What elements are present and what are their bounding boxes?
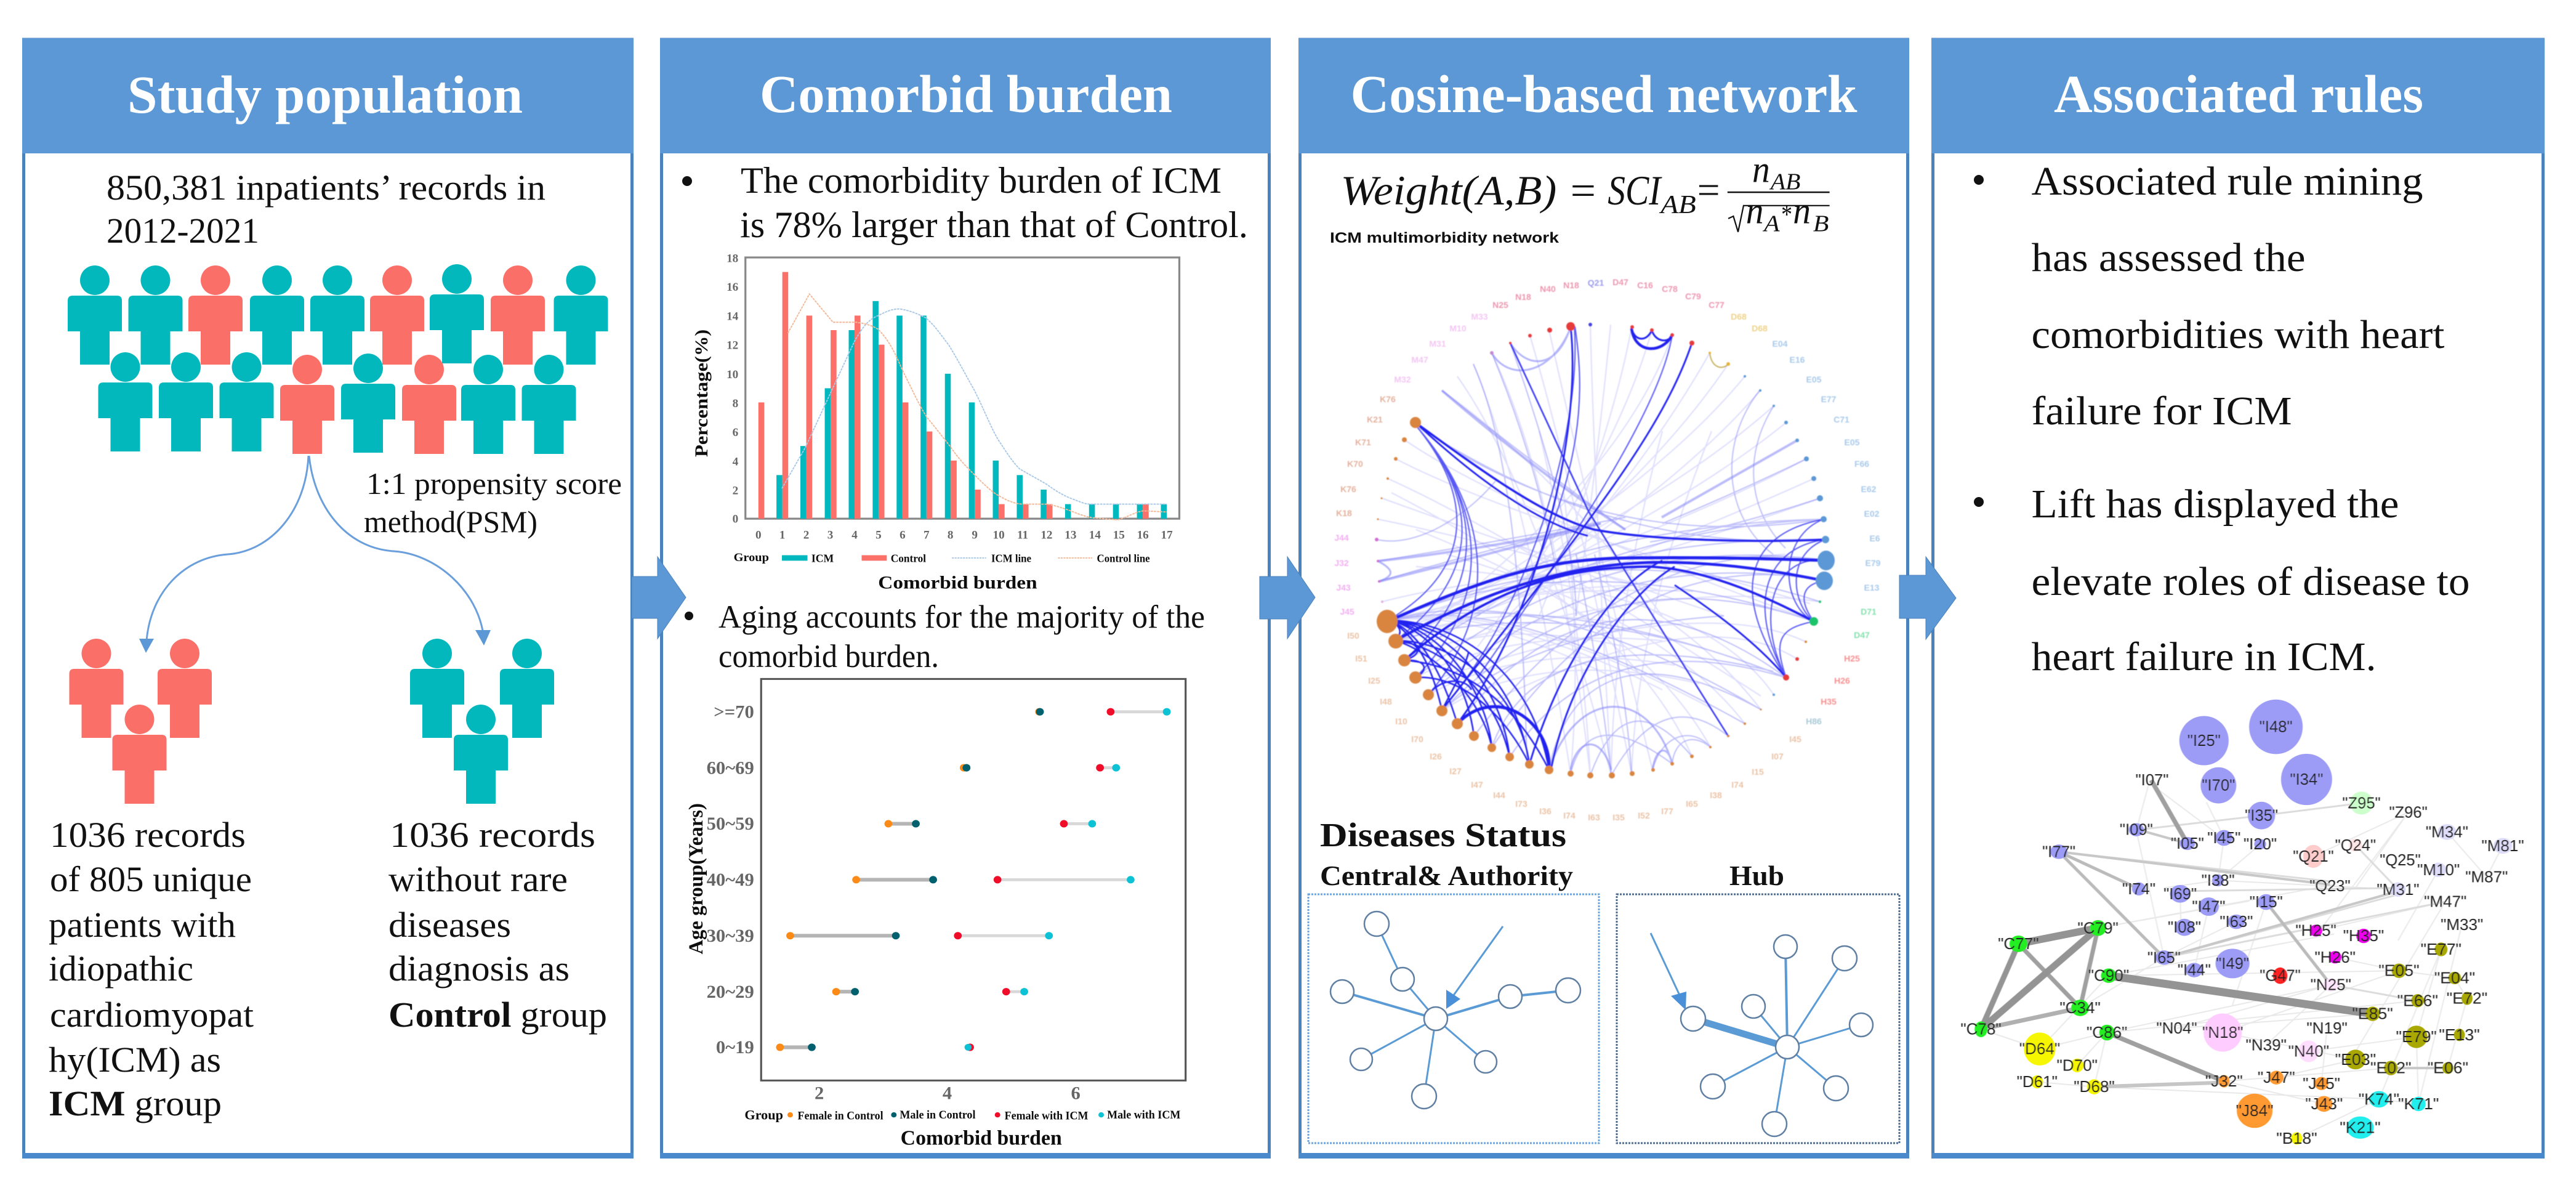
rule network labels: "C77" <box>1998 935 2039 953</box>
rule network labels: "I45" <box>2207 830 2240 847</box>
dumbbell chart: burden by age group: Male with ICM <box>1107 1109 1181 1122</box>
formula: weight equation <box>1341 149 1830 237</box>
chart: association rule network <box>1960 700 2524 1147</box>
rule network labels: "J32" <box>2205 1073 2243 1090</box>
rule network labels: "J43" <box>2305 1095 2343 1113</box>
bar chart: comorbid burden distribution: 4 <box>851 529 858 542</box>
formula: weight equation: AB <box>1769 169 1800 195</box>
network node labels: E6 <box>1869 533 1880 543</box>
network node labels: H86 <box>1806 716 1822 726</box>
network node labels: I73 <box>1515 799 1527 809</box>
bar chart: comorbid burden distribution: Control line <box>1097 552 1150 564</box>
text: aging bullet <box>685 599 1205 674</box>
text: rule mining bullet <box>1974 159 2444 434</box>
rule network labels: "E05" <box>2378 962 2420 980</box>
text: rule mining bullet: has assessed the <box>2032 235 2305 280</box>
network node labels: J43 <box>1336 583 1351 592</box>
arrow: population to burden <box>632 557 686 639</box>
rule network labels: "Q24" <box>2335 836 2376 854</box>
header: study population: Study population <box>127 65 523 124</box>
network node labels: E05 <box>1806 374 1822 384</box>
text: control group description: Control group <box>388 995 607 1035</box>
text: ICM group description <box>49 815 254 1123</box>
rule network labels: "Q21" <box>2293 847 2334 865</box>
text: propensity score method <box>364 466 622 539</box>
rule network labels: "I63" <box>2220 913 2253 931</box>
bar chart: comorbid burden distribution: 4 <box>733 455 739 468</box>
strong network edges <box>1390 326 1826 770</box>
text: propensity score method: method(PSM) <box>364 504 537 539</box>
formula: weight equation: AB <box>1659 190 1696 219</box>
network node labels: I51 <box>1355 653 1367 663</box>
network node labels: N18 <box>1515 292 1531 302</box>
network node labels: M10 <box>1449 323 1467 333</box>
network node labels: I07 <box>1771 751 1784 761</box>
bar chart: comorbid burden distribution: 9 <box>972 529 978 542</box>
network node labels: I15 <box>1752 767 1764 777</box>
diagram: hub node <box>1617 894 1899 1143</box>
text: control group description: diagnosis as <box>388 948 570 989</box>
bar chart: comorbid burden distribution: ICM line <box>991 552 1031 564</box>
text: aging bullet: Aging accounts for the majority of the <box>718 599 1205 635</box>
network node labels: M33 <box>1471 312 1488 322</box>
network node labels: I36 <box>1539 806 1552 816</box>
network node labels: I77 <box>1661 806 1673 816</box>
rule network labels: "E04" <box>2434 969 2475 987</box>
text: ICM group description: ICM group <box>49 1083 222 1123</box>
heading: ICM multimorbidity network: ICM multimorbidity network <box>1330 230 1560 246</box>
arrow: split to control group <box>309 456 491 645</box>
network node labels: J32 <box>1334 558 1349 568</box>
network node labels: I63 <box>1588 812 1600 822</box>
rule network labels: "I34" <box>2290 771 2323 788</box>
network node labels: I35 <box>1612 812 1625 822</box>
bar chart: comorbid burden distribution: 14 <box>727 310 739 323</box>
rule network labels: "E02" <box>2370 1059 2411 1077</box>
network node labels: I50 <box>1347 631 1359 641</box>
formula: weight equation: B <box>1813 211 1829 237</box>
rule network labels: "D70" <box>2057 1057 2098 1074</box>
bar chart: comorbid burden distribution: 5 <box>875 529 882 542</box>
rule network labels: "I38" <box>2202 871 2235 889</box>
rule network labels: "N19" <box>2306 1020 2348 1037</box>
formula: weight equation: = <box>1571 168 1596 214</box>
rule network labels: "I09" <box>2120 821 2153 839</box>
rule network labels: "J45" <box>2303 1075 2340 1093</box>
network nodes <box>1377 417 1807 778</box>
dumbbell chart: burden by age group: 20~29 <box>707 982 754 1002</box>
formula: weight equation: = <box>1697 168 1720 211</box>
network node labels: D68 <box>1731 312 1747 322</box>
heading: diseases status: Diseases Status <box>1320 816 1566 854</box>
rule network labels: "I77" <box>2042 843 2075 861</box>
network node labels: D47 <box>1854 630 1870 640</box>
network node labels: I44 <box>1493 790 1505 800</box>
rule network labels: "I44" <box>2178 961 2211 979</box>
rule network labels: "D64" <box>2019 1040 2060 1058</box>
text: lift bullet <box>1974 482 2470 679</box>
bar chart: comorbid burden distribution: 6 <box>900 529 906 542</box>
rule network labels: "D61" <box>2017 1074 2058 1091</box>
rule network labels: "I69" <box>2163 885 2197 903</box>
bar chart: comorbid burden distribution: 11 <box>1017 529 1028 542</box>
arrow: points to hub neighbour <box>1651 933 1686 1010</box>
bar chart: comorbid burden distribution: 8 <box>733 397 738 410</box>
network node labels: K71 <box>1355 437 1371 447</box>
rule network labels: "D68" <box>2074 1078 2115 1096</box>
formula: weight equation: SCI <box>1608 168 1662 214</box>
network node labels: K70 <box>1347 459 1363 469</box>
rule network labels: "N39" <box>2246 1037 2287 1054</box>
text: rule mining bullet: failure for ICM <box>2032 389 2292 434</box>
network node labels: E02 <box>1864 509 1880 519</box>
formula: weight equation: n <box>1746 190 1763 232</box>
rule network labels: "E03" <box>2335 1051 2376 1069</box>
bar chart: comorbid burden distribution: 13 <box>1065 529 1076 542</box>
text: lift bullet: heart failure in ICM. <box>2032 634 2377 679</box>
formula: weight equation: n <box>1752 149 1770 191</box>
text: total records <box>107 168 545 251</box>
formula: weight equation: * <box>1781 199 1792 230</box>
rule network labels: "I07" <box>2135 772 2168 789</box>
arrow: split to ICM group <box>139 456 308 653</box>
rule network labels: "I49" <box>2216 955 2249 973</box>
network node labels: H26 <box>1834 676 1850 685</box>
bar chart: comorbid burden distribution: 2 <box>733 485 738 498</box>
formula: weight equation: Weight(A,B) <box>1341 168 1556 214</box>
network node labels: E62 <box>1861 484 1877 494</box>
rule network labels: "K71" <box>2398 1095 2439 1113</box>
rule network labels: "I20" <box>2244 836 2277 853</box>
network node labels: I74 <box>1731 780 1744 790</box>
icon: crowd of patients <box>68 264 608 454</box>
dumbbell chart: burden by age group: Comorbid burden <box>901 1126 1062 1149</box>
rule network labels: "I08" <box>2168 919 2201 936</box>
text: burden bullet: The comorbidity burden of ICM <box>741 160 1222 201</box>
bar chart: comorbid burden distribution: 15 <box>1113 529 1125 542</box>
text: ICM group description: cardiomyopat <box>50 995 254 1035</box>
dumbbell chart: burden by age group: 40~49 <box>707 870 754 890</box>
dumbbell chart: burden by age group: >=70 <box>714 702 754 722</box>
text: ICM group description: of 805 unique <box>50 859 252 899</box>
rule network labels: "M31" <box>2377 881 2420 899</box>
network node labels: N40 <box>1540 284 1556 294</box>
network node labels: N25 <box>1492 300 1508 310</box>
bar chart: comorbid burden distribution: 12 <box>727 339 738 352</box>
rule network labels: "M87" <box>2465 868 2508 886</box>
rule network labels: "K21" <box>2340 1119 2381 1136</box>
network node labels: K21 <box>1367 415 1383 424</box>
bar chart: comorbid burden distribution: 12 <box>1040 529 1052 542</box>
rule network labels: "N18" <box>2202 1024 2243 1041</box>
network node labels: M47 <box>1411 355 1428 365</box>
rule network labels: "I48" <box>2260 718 2293 736</box>
dumbbell chart: burden by age group: 30~39 <box>707 926 754 946</box>
network node labels: C77 <box>1709 300 1725 310</box>
bar chart: comorbid burden distribution: 0 <box>733 513 738 526</box>
rule network labels: "C78" <box>1960 1021 2002 1038</box>
rule network labels: "I25" <box>2188 732 2221 750</box>
network node labels: F66 <box>1854 459 1869 469</box>
network node labels: N18 <box>1563 280 1579 290</box>
text: ICM group description: idiopathic <box>49 948 193 989</box>
network node labels: I70 <box>1411 734 1423 744</box>
rule network labels: "I65" <box>2147 949 2181 966</box>
network node labels: I74 <box>1563 811 1576 820</box>
header: associated rules: Associated rules <box>2054 64 2423 124</box>
bar chart: comorbid burden distribution: 10 <box>727 368 738 381</box>
rule network labels: "G47" <box>2260 967 2301 985</box>
header: cosine-based network <box>1298 38 1909 153</box>
network node labels: E77 <box>1821 394 1837 404</box>
rule network labels: "E06" <box>2428 1059 2468 1077</box>
faint network edges <box>1377 325 1826 775</box>
network node labels: H35 <box>1821 697 1837 706</box>
rule network labels: "I35" <box>2245 807 2278 825</box>
network node labels: C16 <box>1637 280 1653 290</box>
arrow: network to rules <box>1899 557 1956 639</box>
network node labels: M31 <box>1429 339 1446 349</box>
text: control group description: diseases <box>388 905 511 945</box>
network node labels: D71 <box>1861 607 1877 617</box>
dumbbell chart: burden by age group: Age group(Years) <box>684 803 707 955</box>
network node labels: C79 <box>1685 291 1701 301</box>
dumbbell chart: burden by age group: Female with ICM <box>1005 1109 1089 1122</box>
bar chart: comorbid burden distribution: 1 <box>779 529 785 542</box>
rule network labels: "I05" <box>2171 835 2204 852</box>
dumbbell chart: burden by age group: Male in Control <box>900 1109 976 1122</box>
header: comorbid burden: Comorbid burden <box>760 64 1172 124</box>
rule network labels: "C86" <box>2087 1024 2127 1041</box>
rule network labels: "E13" <box>2439 1026 2480 1044</box>
bar chart: comorbid burden distribution: 16 <box>1137 529 1149 542</box>
rule network labels: "N40" <box>2288 1043 2329 1061</box>
dumbbell chart: burden by age group: Female in Control <box>798 1109 883 1122</box>
network node labels: E04 <box>1773 339 1788 349</box>
label: central and authority: Central& Authority <box>1320 860 1573 891</box>
panel: cosine-based network <box>1298 38 1909 1159</box>
text: total records: 2012-2021 <box>107 211 259 251</box>
network node labels: I25 <box>1368 676 1380 685</box>
bar chart: comorbid burden distribution: Control <box>891 552 926 564</box>
rule network labels: "E85" <box>2352 1005 2393 1023</box>
rule network labels: "H26" <box>2315 948 2356 966</box>
text: control group description <box>388 815 607 1035</box>
network node labels: J44 <box>1334 533 1349 543</box>
bar chart: comorbid burden distribution: 17 <box>1161 529 1173 542</box>
bar chart: comorbid burden distribution: 0 <box>755 529 762 542</box>
rule network labels: "H35" <box>2343 928 2384 945</box>
text: control group description: 1036 records <box>390 815 595 855</box>
arrow: burden to network <box>1260 557 1315 639</box>
rule network labels <box>1960 718 2524 1147</box>
network node labels: E13 <box>1864 583 1880 592</box>
rule network labels: "I47" <box>2192 898 2225 916</box>
rule network labels: "I15" <box>2250 894 2283 911</box>
text: burden bullet: is 78% larger than that of Control. <box>740 204 1248 245</box>
rule network labels: "N25" <box>2311 976 2351 994</box>
network node labels: C71 <box>1833 415 1849 424</box>
rule network labels: "E79" <box>2396 1029 2437 1046</box>
rule network nodes <box>2050 700 2332 978</box>
header: study population <box>22 38 634 153</box>
header: associated rules <box>1931 38 2545 153</box>
rule network labels: "C79" <box>2077 920 2119 937</box>
text: rule mining bullet: Associated rule mining <box>2032 159 2423 204</box>
bar chart: comorbid burden distribution <box>692 253 1179 593</box>
dumbbell chart: burden by age group: 0~19 <box>716 1038 754 1058</box>
rule network labels: "Q25" <box>2380 851 2421 869</box>
diagram: central and authority node <box>1308 894 1599 1143</box>
network node labels: C78 <box>1662 284 1678 294</box>
network node labels: I52 <box>1638 811 1650 820</box>
rule network labels: "C34" <box>2059 1000 2101 1017</box>
bar chart: comorbid burden distribution: 10 <box>993 529 1005 542</box>
text: ICM group description: patients with <box>49 905 236 945</box>
network node labels: H25 <box>1844 653 1860 663</box>
rule network labels: "H25" <box>2295 922 2337 940</box>
network node labels: D47 <box>1612 277 1628 287</box>
rule network labels: "K74" <box>2359 1091 2399 1108</box>
rule network labels: "M10" <box>2417 861 2460 879</box>
header: comorbid burden <box>660 38 1271 153</box>
network node labels: I65 <box>1686 799 1698 809</box>
dumbbell chart: burden by age group: 4 <box>943 1083 952 1103</box>
bar chart: comorbid burden distribution: 8 <box>948 529 953 542</box>
rule network labels: "M34" <box>2426 823 2468 841</box>
text: ICM group description: hy(ICM) as <box>49 1040 221 1080</box>
rule network labels: "J84" <box>2236 1102 2273 1120</box>
bar chart: comorbid burden distribution: 16 <box>727 281 738 294</box>
network node labels: I26 <box>1430 751 1442 761</box>
bar chart: comorbid burden distribution: 2 <box>803 529 809 542</box>
rule network edges <box>1981 780 2503 1138</box>
text: ICM group description: 1036 records <box>50 815 246 855</box>
dumbbell chart: burden by age group: 2 <box>815 1083 824 1103</box>
text: lift bullet: Lift has displayed the <box>2032 482 2399 527</box>
dumbbell chart: burden by age group: Group <box>744 1107 783 1122</box>
rule network labels: "E77" <box>2421 941 2461 958</box>
network node labels: I27 <box>1449 766 1462 776</box>
rule network labels: "M81" <box>2481 837 2524 855</box>
network node labels: I47 <box>1471 780 1483 790</box>
formula: weight equation: A <box>1762 211 1780 237</box>
network node labels: D68 <box>1752 323 1768 333</box>
bar chart: comorbid burden distribution: Percentage(%) <box>692 330 712 457</box>
rule network labels: "I74" <box>2122 880 2155 898</box>
rule network labels: "C90" <box>2088 967 2129 985</box>
rule network labels: "Z95" <box>2342 795 2381 812</box>
text: propensity score method: 1:1 propensity score <box>366 466 622 501</box>
label: hub: Hub <box>1729 860 1784 891</box>
network node labels: E05 <box>1845 437 1860 447</box>
bar chart: comorbid burden distribution: 3 <box>827 529 833 542</box>
chart: circular multimorbidity network <box>1334 277 1881 822</box>
network node labels: I38 <box>1710 790 1722 800</box>
text: lift bullet: elevate roles of disease to <box>2032 559 2470 604</box>
arrow: points to central node <box>1446 926 1503 1009</box>
network node labels: K76 <box>1380 394 1396 404</box>
network node labels <box>1334 277 1881 822</box>
rule network labels: "N04" <box>2156 1020 2197 1037</box>
icon: ICM patients <box>69 639 212 804</box>
text: burden bullet <box>682 160 1248 245</box>
bar chart: comorbid burden distribution: Comorbid burden <box>878 573 1037 593</box>
bar chart: comorbid burden distribution: Group <box>734 551 769 564</box>
text: control group description: without rare <box>388 859 568 899</box>
rule network labels: "Z96" <box>2389 804 2428 821</box>
rule network labels: "B18" <box>2276 1130 2317 1147</box>
icon: control patients <box>410 639 554 804</box>
formula: weight equation: n <box>1793 190 1811 232</box>
network node labels: I10 <box>1395 716 1407 726</box>
dumbbell chart: burden by age group: 6 <box>1071 1083 1081 1103</box>
network node labels: E79 <box>1866 558 1881 568</box>
network node labels: E16 <box>1790 355 1805 365</box>
network node labels: J45 <box>1340 607 1354 617</box>
rule network labels: "M33" <box>2441 916 2483 934</box>
network node labels: Q21 <box>1588 278 1604 288</box>
bar chart: comorbid burden distribution: 14 <box>1089 529 1101 542</box>
bar chart: comorbid burden distribution: 18 <box>727 253 738 265</box>
bar chart: comorbid burden distribution: 7 <box>924 529 930 542</box>
header: cosine-based network: Cosine-based network <box>1351 64 1858 124</box>
panel: study population <box>22 38 634 1159</box>
rule network labels: "E72" <box>2447 990 2487 1008</box>
rule network labels: "Q23" <box>2309 877 2351 895</box>
text: aging bullet: comorbid burden. <box>718 639 939 674</box>
network node labels: I48 <box>1380 697 1392 706</box>
dumbbell chart: burden by age group <box>684 679 1186 1149</box>
network node labels: K76 <box>1340 484 1356 494</box>
rule network labels: "I70" <box>2202 777 2235 795</box>
panel: comorbid burden <box>660 38 1271 1159</box>
network node labels: I45 <box>1789 734 1801 744</box>
bar chart: comorbid burden distribution: 6 <box>733 426 738 439</box>
dumbbell chart: burden by age group: 50~59 <box>707 814 754 834</box>
bar chart: comorbid burden distribution: ICM <box>811 552 834 564</box>
network node labels: K18 <box>1336 508 1352 518</box>
rule network labels: "E66" <box>2397 992 2438 1009</box>
rule network labels: "M47" <box>2424 893 2466 911</box>
network node labels: M32 <box>1394 374 1411 384</box>
text: total records: 850,381 inpatients’ records in <box>107 168 545 208</box>
dumbbell chart: burden by age group: 60~69 <box>707 758 754 778</box>
rule network labels: "J47" <box>2258 1069 2295 1086</box>
panel: associated rules <box>1931 38 2545 1159</box>
text: rule mining bullet: comorbidities with heart <box>2032 312 2444 357</box>
